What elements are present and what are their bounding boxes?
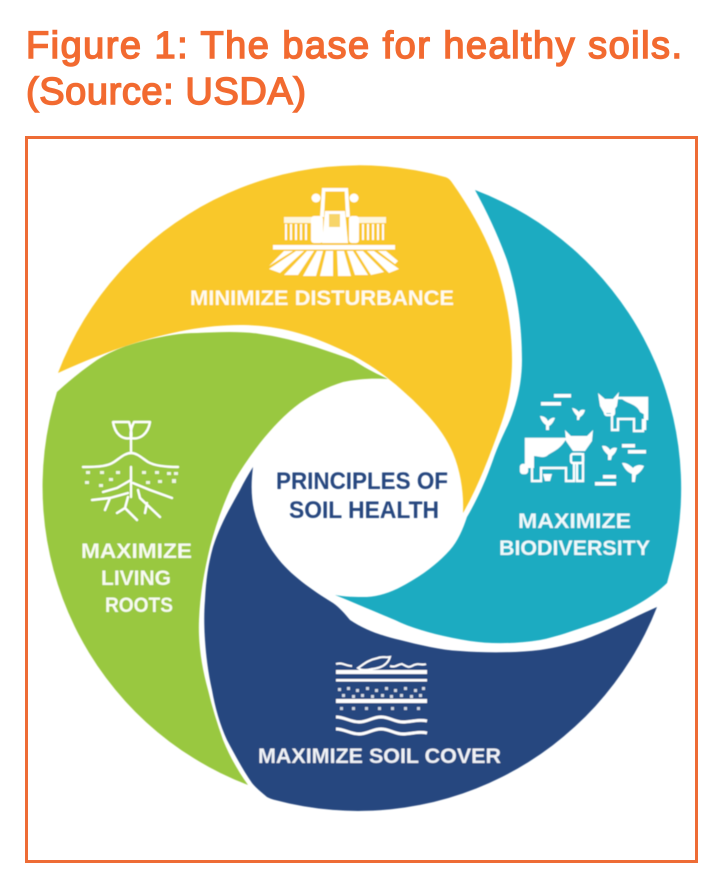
icon: cows and plants <box>521 392 647 481</box>
icon: soil cover layers <box>336 657 427 734</box>
label: minimize disturbance: MINIMIZE DISTURBANCE <box>190 287 454 310</box>
label: maximize living roots: ROOTS <box>105 594 173 617</box>
label: maximize biodiversity: BIODIVERSITY <box>499 537 650 560</box>
title: (Source: USDA) <box>26 71 306 113</box>
icon: large cow <box>521 430 593 481</box>
icon: plant with roots <box>83 422 178 520</box>
diagram: principles of soil health wheel <box>43 165 681 811</box>
center label: principles of soil health <box>276 468 448 524</box>
title: Figure 1: The base for healthy soils. <box>26 25 682 67</box>
label: maximize living roots: MAXIMIZE <box>81 540 192 563</box>
label: maximize soil cover: MAXIMIZE SOIL COVER <box>258 745 501 768</box>
icon: plants and dashes <box>540 394 646 486</box>
panel: maximize living roots <box>43 332 388 785</box>
label: maximize biodiversity <box>499 510 650 560</box>
panel: maximize biodiversity <box>335 190 681 643</box>
icon: tractor and furrows <box>269 188 399 276</box>
label: maximize biodiversity: MAXIMIZE <box>518 510 631 533</box>
center label: principles of soil health: SOIL HEALTH <box>289 497 439 524</box>
panel: maximize soil cover <box>204 467 657 811</box>
icon: soil dots <box>85 471 178 487</box>
icon: small cow <box>598 392 647 431</box>
panel: minimize disturbance <box>58 165 512 513</box>
figure frame <box>26 138 696 862</box>
center label: principles of soil health: PRINCIPLES OF <box>276 468 448 495</box>
title <box>26 25 682 113</box>
label: maximize living roots <box>81 540 192 617</box>
label: maximize living roots: LIVING <box>101 567 171 590</box>
